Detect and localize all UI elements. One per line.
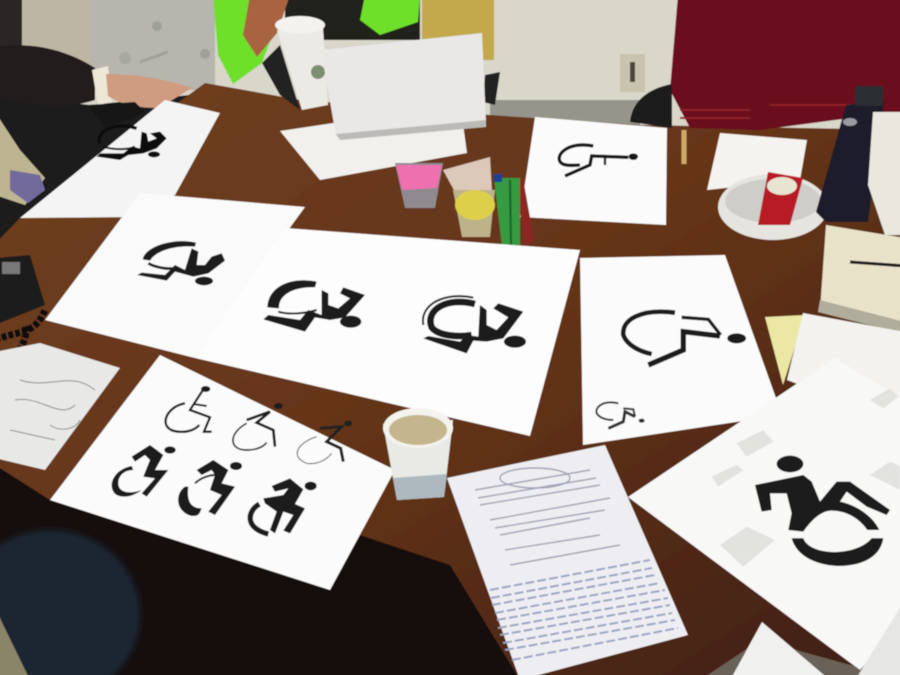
notebook top right — [707, 133, 807, 190]
icon: wheelchair, second-row paper — [137, 241, 225, 285]
paper: right stack — [787, 313, 900, 425]
paper: top left with icon — [20, 100, 220, 218]
paper: yellow legal pad right — [765, 315, 805, 385]
person: green shirt and arm — [213, 0, 500, 110]
paper: lower-left sheet with six icons — [50, 355, 395, 590]
paper: right sheet with large icon — [580, 255, 782, 445]
paper: bottom right with final icon — [628, 358, 900, 670]
marker bundle — [494, 174, 534, 247]
notebook right edge — [818, 225, 900, 334]
water bottle — [816, 86, 884, 222]
paper: large centre sheet with two icons — [195, 228, 580, 436]
laptop — [321, 33, 486, 140]
icon: final wheelchair — [755, 456, 890, 566]
bowl with milk carton — [718, 172, 828, 240]
text blocks: small grey paragraphs — [712, 388, 900, 567]
phone and cord left edge — [0, 255, 45, 375]
icon: wheelchair, top paper — [559, 145, 638, 176]
paper: sketch sheet left — [0, 343, 120, 470]
cups at right edge — [868, 112, 900, 235]
wall background — [0, 0, 900, 140]
icon: thin wheelchair 3 — [297, 420, 352, 464]
person: red sweater — [670, 0, 900, 134]
paper: top right with icon — [520, 117, 667, 225]
icon: thin wheelchair 2 — [233, 403, 283, 450]
paper: far corner sheet — [855, 600, 900, 675]
icon: bold wheelchair 1 — [112, 445, 176, 497]
paper: bottom-right corner sheet — [730, 622, 830, 675]
icon: thin wheelchair 1 — [166, 386, 212, 432]
paper: under laptop — [280, 122, 467, 180]
black chair back — [630, 84, 672, 128]
pen — [682, 130, 686, 164]
icon: wheelchair, right sheet small — [596, 402, 645, 428]
icon: bold wheelchair 2 — [178, 460, 242, 516]
wall outlet — [620, 54, 645, 92]
yellow cup on table — [443, 157, 495, 237]
icon: bold wheelchair 3 — [250, 478, 317, 534]
icon: wheelchair, centre left — [263, 280, 365, 332]
icon: wheelchair, right sheet large — [623, 312, 746, 365]
dark area under the left arm — [0, 95, 190, 250]
takeaway cup — [275, 16, 328, 110]
pink cup on table — [395, 163, 443, 208]
paper: annotated notes — [447, 445, 688, 675]
paper: second row left with icon — [45, 193, 305, 358]
dark floor and lap foreground — [0, 465, 520, 675]
paper cup on table — [383, 408, 453, 500]
icon: wheelchair, centre right — [423, 296, 526, 353]
person: left sleeve and hand — [0, 45, 192, 205]
icon: wheelchair, top-left paper — [97, 126, 167, 160]
